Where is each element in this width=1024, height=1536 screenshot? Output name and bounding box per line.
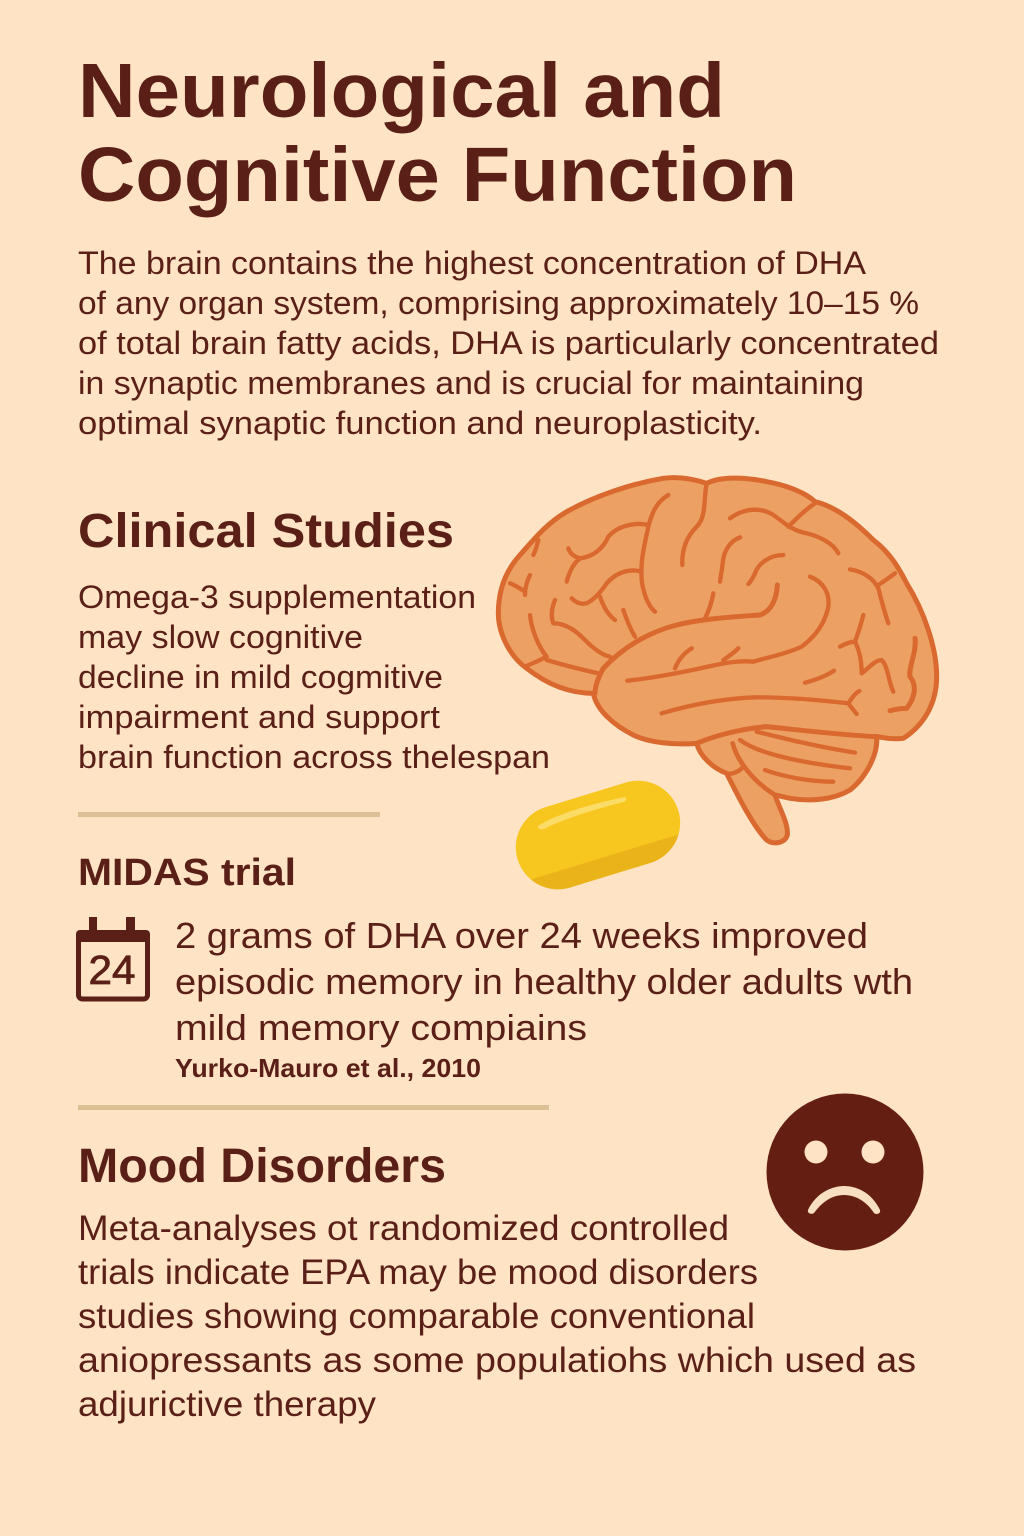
divider: [78, 812, 380, 817]
title: [78, 48, 797, 218]
intro text block: in synaptic membranes and is crucial for maintaining: [78, 365, 864, 401]
intro text block: of total brain fatty acids, DHA is particularly concentrated: [78, 325, 939, 361]
icon: brain: [498, 478, 937, 843]
text block: MIDAS trial: 2 grams of DHA over 24 weeks improved: [175, 915, 868, 956]
text block: clinical studies: impairment and support: [78, 699, 440, 735]
text block: MIDAS trial: [175, 915, 913, 1048]
intro text block: [78, 245, 939, 441]
heading: mood disorders: Mood Disorders: [78, 1140, 446, 1193]
text block: clinical studies: [78, 579, 550, 775]
text block: mood disorders: Meta-analyses ot randomized controlled: [78, 1209, 729, 1248]
intro text block: The brain contains the highest concentration of DHA: [78, 245, 867, 281]
intro text block: optimal synaptic function and neuroplasticity.: [78, 405, 762, 441]
intro text block: of any organ system, comprising approximately 10–15 %: [78, 285, 919, 321]
text block: mood disorders: studies showing comparable conventional: [78, 1297, 755, 1336]
icon: yellow capsule: [516, 780, 680, 890]
text block: clinical studies: decline in mild cogmitive: [78, 659, 443, 695]
text block: clinical studies: brain function across thelespan: [78, 739, 550, 775]
citation: Yurko-Mauro et al., 2010: [175, 1053, 481, 1083]
text block: mood disorders: trials indicate EPA may be mood disorders: [78, 1253, 758, 1292]
icon: calendar 24: 24: [88, 947, 136, 993]
divider: [78, 1105, 549, 1110]
text block: mood disorders: [78, 1209, 916, 1424]
text block: MIDAS trial: mild memory compiains: [175, 1007, 587, 1048]
icon: calendar 24: [76, 917, 150, 999]
title: Cognitive Function: [78, 132, 797, 218]
text block: clinical studies: Omega-3 supplementation: [78, 579, 476, 615]
title: Neurological and: [78, 48, 725, 134]
text block: mood disorders: aniopressants as some populatiohs which used as: [78, 1341, 916, 1380]
heading: MIDAS trial: MIDAS trial: [78, 852, 296, 894]
heading: clinical studies: Clinical Studies: [78, 505, 454, 558]
text block: MIDAS trial: episodic memory in healthy older adults wth: [175, 961, 913, 1002]
text block: clinical studies: may slow cognitive: [78, 619, 363, 655]
icon: sad face: [766, 1094, 924, 1250]
text block: mood disorders: adjurictive therapy: [78, 1385, 377, 1424]
